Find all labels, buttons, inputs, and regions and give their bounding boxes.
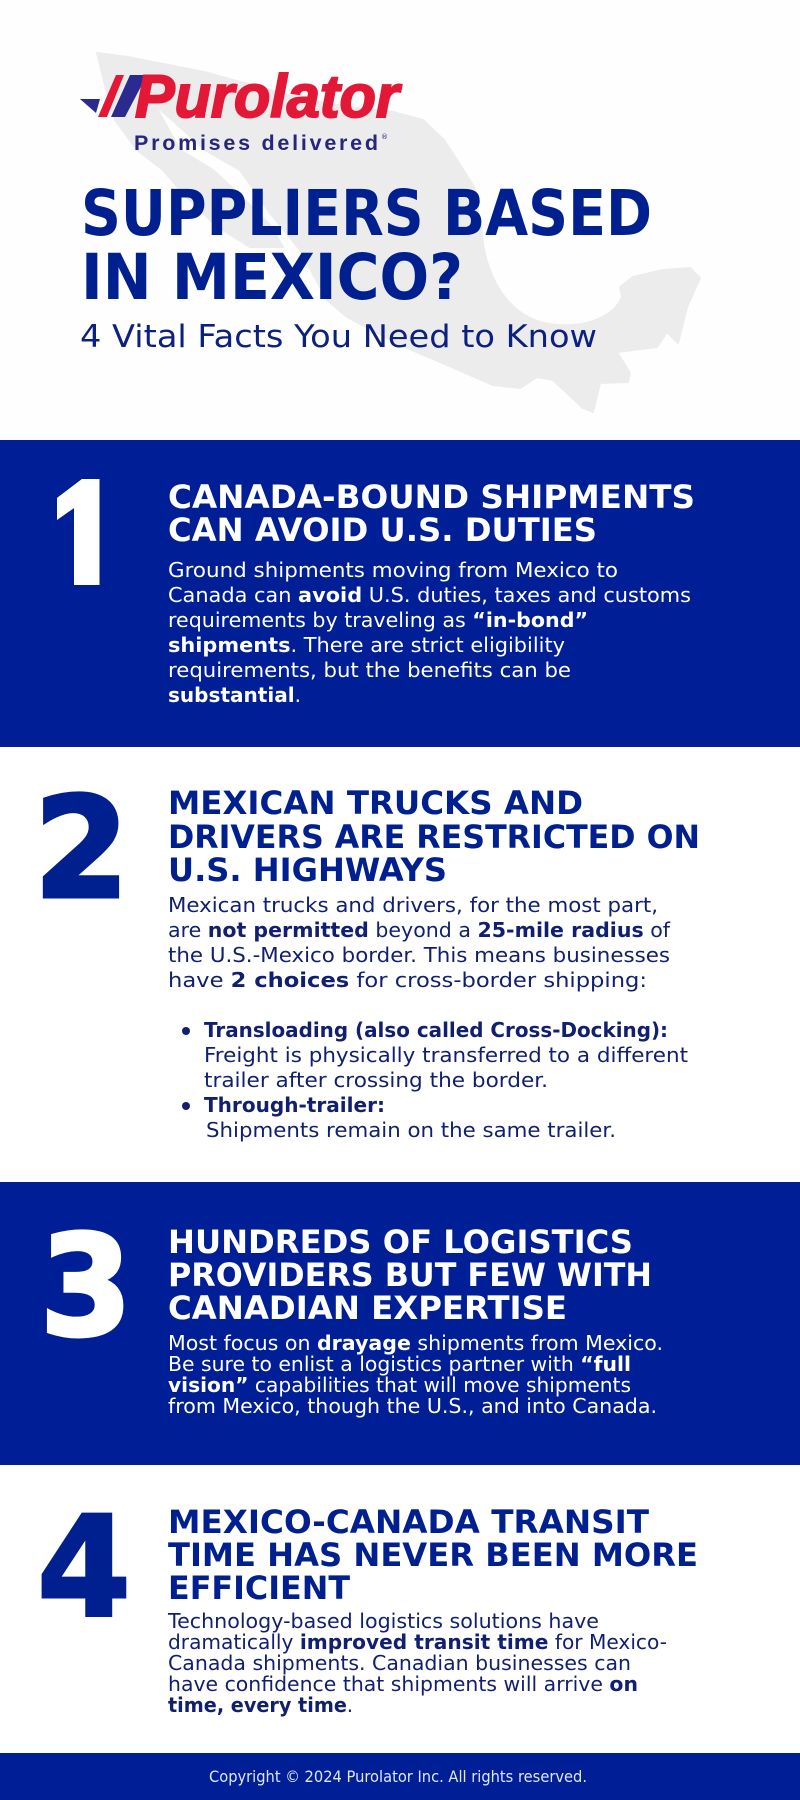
bullet: through-trailer: Through-trailer: [204,1093,385,1117]
heading 2: MEXICAN TRUCKS AND [168,784,583,822]
number 3: 3 [40,1206,132,1368]
panel: fact 2 [0,747,800,1182]
body text 2: are not permitted beyond a 25-mile radius of [168,918,671,942]
panel: fact 3 [0,1182,800,1465]
registered mark: ® [381,133,388,141]
subtitle: 4 Vital Facts You Need to Know [80,319,597,355]
bullet: through-trailer [182,1093,616,1142]
body text 1: requirements by traveling as “in-bond” [168,608,588,632]
Purolator logo [80,63,403,155]
body text 4: time, every time. [168,1693,353,1717]
title: SUPPLIERS BASED [81,177,652,250]
header panel [0,0,800,440]
number 1: 1 [25,450,135,620]
heading 3: CANADIAN EXPERTISE [168,1289,567,1327]
body text 1 [168,558,691,707]
tagline: Promises delivered [134,131,378,155]
body text 1: Ground shipments moving from Mexico to [168,558,618,582]
heading 2: U.S. HIGHWAYS [168,851,447,889]
body text 3: from Mexico, though the U.S., and into Canada. [168,1394,657,1418]
body text 4: dramatically improved transit time for Mexico- [168,1630,667,1654]
body text 3 [168,1331,663,1418]
panel: fact 4 [0,1465,800,1753]
body text 1: requirements, but the benefits can be [168,658,571,682]
panel: fact 1 [0,440,800,747]
heading 3: PROVIDERS BUT FEW WITH [168,1256,652,1294]
body text 4: have confidence that shipments will arrive on [168,1672,638,1696]
bullet: transloading: Transloading (also called Cross-Docking): [204,1018,668,1042]
heading 4: MEXICO-CANADA TRANSIT [168,1503,649,1541]
bullet: transloading [182,1018,688,1092]
map of Mexico watermark [97,53,700,412]
body text 2 [168,893,671,992]
heading 4 [168,1503,698,1607]
title [81,177,652,314]
heading 4: TIME HAS NEVER BEEN MORE [168,1536,698,1574]
logo wordmark: Purolator [135,63,403,130]
heading 3: HUNDREDS OF LOGISTICS [168,1223,633,1261]
bullet: transloading: trailer after crossing the border. [204,1068,548,1092]
heading 1: CANADA-BOUND SHIPMENTS [168,478,695,516]
heading 4: EFFICIENT [168,1569,350,1607]
copyright: Copyright © 2024 Purolator Inc. All rights reserved. [209,1767,587,1786]
body text 4 [167,1609,667,1717]
bullet: transloading: Freight is physically transferred to a different [204,1043,688,1067]
number 4: 4 [37,1486,131,1648]
heading 1: CAN AVOID U.S. DUTIES [168,511,597,549]
footer band [0,1753,800,1800]
body text 3: Most focus on drayage shipments from Mexico. [168,1331,663,1355]
body text 4: Canada shipments. Canadian businesses can [168,1651,631,1675]
heading 3 [168,1223,652,1327]
heading 2: DRIVERS ARE RESTRICTED ON [168,818,700,856]
body text 2: the U.S.-Mexico border. This means businesses [168,943,670,967]
bullet: through-trailer: Shipments remain on the same trailer. [206,1118,616,1142]
body text 3: Be sure to enlist a logistics partner with “full [168,1352,631,1376]
number 2: 2 [34,768,129,930]
heading 1 [168,478,695,549]
heading 2 [168,784,700,889]
body text 2: have 2 choices for cross-border shipping: [168,968,647,992]
body text 1: shipments. There are strict eligibility [168,633,565,657]
body text 2: Mexican trucks and drivers, for the most part, [168,893,658,917]
body text 4: Technology-based logistics solutions have [167,1609,599,1633]
body text 1: substantial. [168,683,301,707]
body text 3: vision” capabilities that will move shipments [168,1373,631,1397]
logo mark [80,75,147,117]
title: IN MEXICO? [81,241,463,314]
body text 1: Canada can avoid U.S. duties, taxes and customs [168,583,691,607]
